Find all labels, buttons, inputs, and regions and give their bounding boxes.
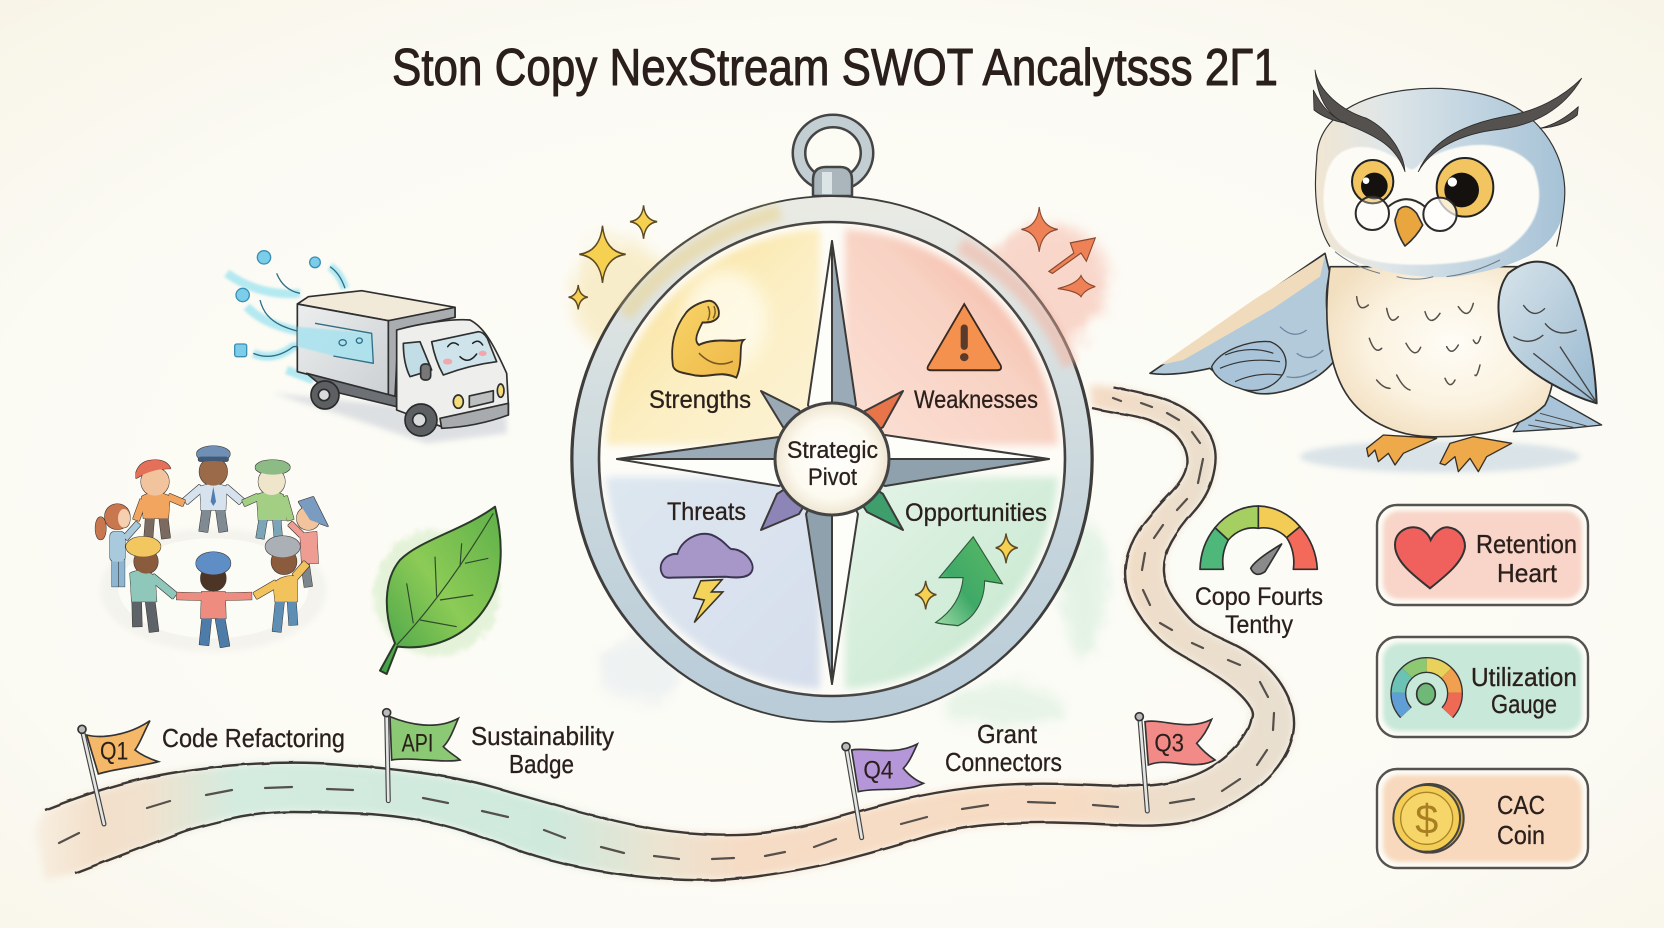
green leaf <box>373 507 501 674</box>
person: blue cap shirt and tie <box>185 446 242 532</box>
icon: coin <box>1393 784 1464 853</box>
flag: Q1: Q1 <box>100 737 128 765</box>
owl belly <box>1327 267 1555 437</box>
leaf blade <box>380 507 501 674</box>
leaf veins <box>397 513 493 645</box>
gauge caption: Tenthy <box>1225 611 1293 639</box>
quadrant: opportunities green <box>845 477 1058 689</box>
chest feathers <box>1357 297 1481 390</box>
person: orange sweater <box>136 460 184 538</box>
label: code refactoring: Code Refactoring <box>162 723 345 753</box>
owl eyes <box>1352 158 1493 217</box>
leaf wash <box>373 530 500 657</box>
truck smiling face <box>443 341 487 365</box>
compass ring <box>572 197 1092 721</box>
quadrants <box>606 229 1058 689</box>
compass star needle <box>617 241 1049 684</box>
owl feet <box>1367 435 1512 472</box>
flag: Q4 <box>842 743 923 838</box>
card: utilization gauge: Utilization <box>1471 662 1577 692</box>
flag: Q1 <box>78 721 158 824</box>
icon: storm cloud <box>661 534 753 622</box>
compass <box>569 121 1108 727</box>
watercolor bleed around compass <box>570 223 1108 727</box>
gauge caption: Copo Fourts <box>1195 583 1323 611</box>
round glasses <box>1356 197 1457 231</box>
gauge caption <box>1195 583 1323 639</box>
center hub <box>775 403 889 515</box>
ground ring <box>100 528 327 652</box>
card: cac coin <box>1377 769 1588 868</box>
cargo box <box>297 291 455 407</box>
flag: Q3: Q3 <box>1154 730 1184 758</box>
owl tail <box>1513 390 1602 432</box>
flag: API: API <box>402 730 433 758</box>
roadmap road <box>35 385 1294 880</box>
title: Ston Copy NexStream SWOT Ancalytsss 2Γ1 <box>392 39 1278 97</box>
icon: coin: $ <box>1415 795 1438 842</box>
card: retention heart <box>1377 505 1588 605</box>
person: green sweater <box>243 460 291 538</box>
person: front salmon sweater <box>177 552 252 647</box>
person: ponytail <box>95 504 138 587</box>
speedometer gauge <box>1200 506 1317 574</box>
label: grant connectors: Connectors <box>945 747 1062 777</box>
label: grant connectors: Grant <box>977 719 1038 749</box>
pendant loop <box>799 121 867 196</box>
sparkles: strengths <box>569 205 657 309</box>
label: threats: Threats <box>667 498 746 526</box>
data panel <box>297 323 373 363</box>
label: sustainability badge <box>471 721 614 779</box>
pointing wing <box>1150 253 1335 394</box>
label: opportunities: Opportunities <box>905 499 1047 527</box>
card: retention heart: Heart <box>1497 558 1558 588</box>
quadrant: strengths yellow <box>606 229 820 445</box>
label: strengths: Strengths <box>649 386 751 414</box>
quadrant: weaknesses red <box>845 229 1058 445</box>
card: utilization gauge <box>1377 637 1588 737</box>
person: grey cap yellow sweater <box>255 536 307 632</box>
sparkles: weaknesses <box>1021 207 1095 297</box>
icon: heart <box>1395 527 1465 588</box>
delivery truck <box>227 251 508 443</box>
flag: Q3 <box>1135 713 1215 811</box>
icon: growth arrow <box>915 534 1018 626</box>
card: cac coin: CAC <box>1497 790 1545 820</box>
label: sustainability badge: Badge <box>509 749 574 779</box>
quadrant highlight <box>683 270 767 370</box>
label: grant connectors <box>945 719 1062 777</box>
card: retention heart: Retention <box>1476 529 1577 559</box>
card: cac coin: Coin <box>1497 820 1545 850</box>
truck wheels <box>311 381 437 436</box>
flag: API <box>383 709 460 801</box>
data streams <box>227 251 345 380</box>
truck cab <box>397 320 508 428</box>
icon: warning triangle <box>928 304 1001 370</box>
owl shadow <box>1300 441 1580 473</box>
quadrant: threats blue <box>606 477 820 689</box>
sparkles and icons in zoom coordinates <box>569 205 1095 626</box>
card: utilization gauge: Gauge <box>1491 689 1557 719</box>
owl beak <box>1395 207 1423 246</box>
center hub: Strategic <box>787 437 878 464</box>
owl head <box>1315 88 1565 279</box>
owl mascot <box>1150 70 1602 473</box>
owl face mask <box>1323 145 1539 265</box>
center hub: Pivot <box>808 464 857 491</box>
label: weaknesses: Weaknesses <box>914 386 1038 414</box>
icon: flexed arm <box>672 301 744 378</box>
flag: Q4: Q4 <box>863 756 893 784</box>
team circle <box>95 446 328 652</box>
icon: mini gauge <box>1398 665 1455 713</box>
person: yellow cap teal sweater <box>126 537 175 632</box>
ear tufts <box>1313 70 1582 172</box>
right wing <box>1498 262 1597 403</box>
person: pink sweater blue hat <box>290 497 328 587</box>
truck shadow <box>273 393 507 443</box>
label: sustainability badge: Sustainability <box>471 721 614 751</box>
